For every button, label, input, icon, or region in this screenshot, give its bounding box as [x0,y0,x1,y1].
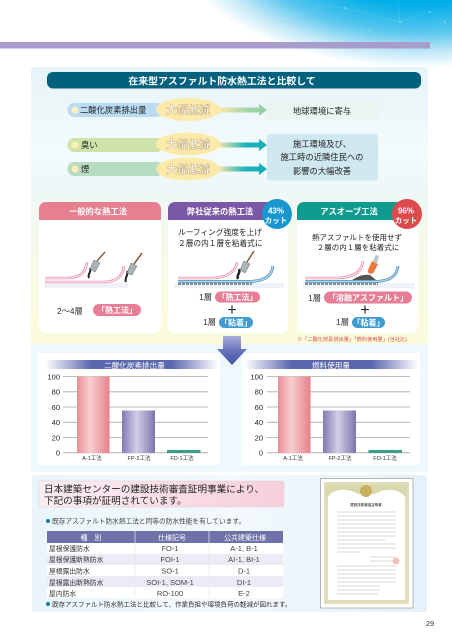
chart title [45,360,218,370]
bar: FP-2 [323,410,356,453]
result: contribution to global environment [267,102,378,119]
bar: FD-1 [167,450,200,453]
chart: fuel usage: FP-2工法 [329,454,352,462]
label: 1 layer adhesive: 1層 [336,317,349,327]
chart title: 二酸化炭素排出量 [104,360,165,370]
bar: A-1 [278,376,310,453]
specification table: 屋根保護防水 [49,544,90,553]
panel: charts background [31,344,428,472]
chart title [245,360,418,370]
chart: CO2 emissions: 20 [52,434,60,442]
row: odor: 大幅低減 [166,137,210,151]
label: 1 layer adhesive: 「粘着」 [352,318,384,328]
card: asu-orb method: アスオーブ工法 [320,206,378,216]
footnote: ※「二酸化炭素排出量」「燃料使用量」(当社比) [297,335,407,343]
row: CO2 emissions [68,98,267,121]
chart: fuel usage: 100 [250,372,263,382]
row: CO2 emissions: 二酸化炭素排出量 [80,105,146,115]
specification table: A-1, B-1 [230,544,258,553]
badge: 96% cut: カット [395,216,417,225]
plus sign: ＋ [360,304,370,316]
specification table: AI-1, BI-1 [228,555,260,564]
chart: CO2 emissions: A-1工法 [82,454,102,462]
bullet: waterproof performance: 既存アスファルト防水熱工法と同等の防水性能を有しています。 [52,516,245,526]
chart: fuel usage [245,360,418,462]
certification heading: 日本建築センターの建設技術審査証明事業により、 [44,484,264,496]
chart: CO2 emissions [45,360,218,462]
label: 1 layer melted asphalt: 「溶融アスファルト」 [328,292,408,302]
label: 2-4 layers hot method: 「熱工法」 [97,305,137,315]
specification table: FOI-1 [160,555,180,564]
result: improved construction environment [267,134,378,180]
header sky background [175,0,452,68]
description text: ２層の内１層を粘着式に [317,242,399,252]
card: general hot method [39,202,161,333]
bar: FD-1 [368,450,402,453]
panel title [47,72,421,88]
result: improved construction environment: 施工時の近隣住民への [281,152,363,162]
specification table: 種 別 [80,533,102,542]
row: CO2 emissions: 大幅低減 [166,102,210,116]
description text [312,232,402,252]
label: 1 layer adhesive: 「粘着」 [220,318,252,328]
row: smoke [68,158,267,180]
card: general hot method: 一般的な熱工法 [69,206,128,216]
page number: 29 [426,619,434,628]
specification table: FO-1 [161,544,179,553]
label: 2-4 layers hot method [57,304,141,316]
row: smoke: 煙 [81,164,89,174]
chart: fuel usage: A-1工法 [283,454,303,462]
chart: CO2 emissions: 40 [52,418,60,427]
chart: CO2 emissions: FP-2工法 [128,454,151,462]
label: 1 layer hot method: 「熱工法」 [218,292,258,302]
specification table: 屋内防水 [49,589,76,598]
result: improved construction environment: 影響の大幅改善 [293,166,351,176]
chart: fuel usage: 20 [255,434,263,442]
label: 1 layer hot method: 1層 [199,292,212,302]
chart title: 燃料使用量 [312,360,350,370]
card: our conventional hot method: 弊社従来の熱工法 [187,206,254,216]
result: contribution to global environment: 地球環境に寄与 [293,106,351,116]
badge: 43% cut [262,199,292,229]
chart: CO2 emissions: 0 [56,448,60,458]
label: 1 layer melted asphalt: 1層 [308,293,321,303]
badge: 43% cut: カット [265,216,287,225]
description text [178,227,263,248]
label: 1 layer adhesive: 1層 [203,317,216,327]
bar: A-1 [77,376,110,453]
chart: fuel usage: 60 [255,403,263,412]
description text: 熱アスファルトを使用せず [312,232,402,242]
row: smoke: 大幅低減 [166,162,210,176]
specification table: SOI-1, SOM-1 [146,578,194,587]
label: 1 layer adhesive [336,317,385,328]
specification table: 屋根露出断熱防水 [49,578,104,587]
description text: ルーフィング強度を上げ [178,227,262,237]
specification table: E-2 [238,589,250,598]
card: our conventional hot method [168,202,288,333]
label: 1 layer hot method [199,292,260,302]
specification table: D-1 [238,566,250,576]
bar: FP-2 [122,410,155,453]
chart: CO2 emissions: 60 [52,403,60,412]
specification table: 屋根保護断熱防水 [49,555,104,564]
badge: 96% cut: 96% [398,206,414,216]
badge: 43% cut: 43% [268,206,284,216]
header purple bar [0,42,430,48]
badge: 96% cut [392,199,422,229]
panel title: 在来型アスファルト防水熱工法と比較して [128,74,316,88]
illustration: roofing with adhesive layer [174,251,284,288]
specification table: RO-100 [157,589,183,598]
chart: fuel usage: 0 [259,448,263,458]
bullet: reduced workload: 既存アスファルト防水熱工法と比較して、作業負担や環境負荷の軽減が図れます。 [52,600,291,608]
certification heading: 下記の事項が証明されています。 [44,495,187,507]
panel: certification [32,475,427,612]
down arrow [217,336,247,365]
illustration: roofing layers with torch [44,252,142,288]
label: 1 layer adhesive [203,317,253,328]
certification heading [39,481,284,507]
label: 2-4 layers hot method: 2～4層 [57,306,83,316]
chart: fuel usage: FO-1工法 [373,454,397,462]
specification table: DI-1 [237,578,251,587]
chart: fuel usage: 40 [255,418,263,427]
chart: CO2 emissions: 80 [52,388,60,396]
specification table: 屋根露出防水 [49,566,90,576]
certificate document: 建設技術審査証明書 [350,502,382,507]
specification table [47,531,283,598]
chart: CO2 emissions: FD-1工法 [170,454,194,462]
specification table: SO-1 [161,566,179,576]
description text: ２層の内１層を粘着式に [178,238,263,248]
label: 1 layer melted asphalt [308,292,412,304]
specification table: 仕様記号 [158,533,186,542]
card: asu-orb method [297,202,418,333]
row: odor [68,132,267,156]
plus sign: ＋ [226,304,238,316]
chart: CO2 emissions: 100 [47,372,60,382]
chart: fuel usage: 80 [255,388,263,396]
row: odor: 臭い [81,140,98,150]
result: improved construction environment: 施工環境及び、 [293,139,351,149]
specification table: 公共建築仕様 [224,533,266,542]
illustration: melted asphalt roofing [303,255,415,288]
certificate document [320,478,413,608]
panel: comparison with conventional method [31,67,428,344]
